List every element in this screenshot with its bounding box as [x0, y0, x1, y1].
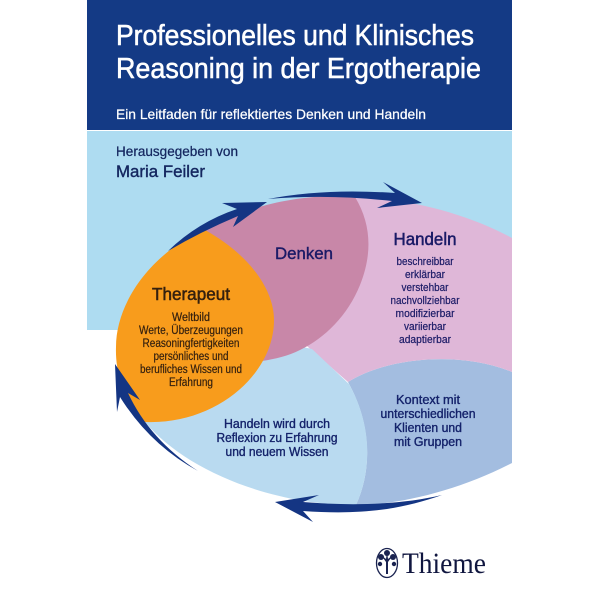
editor credit [116, 143, 238, 181]
text: Therapeut: berufliches Wissen und [140, 364, 242, 376]
text: Therapeut: Weltbild [172, 312, 210, 324]
panel: reflection segment [145, 340, 367, 505]
panel: Kontext segment [348, 359, 512, 505]
arrow: top left [168, 202, 267, 251]
subtitle: Ein Leitfaden für reflektiertes Denken und Handeln [116, 106, 426, 122]
text: Handeln list: beschreibbar [396, 256, 454, 268]
text: Handeln list: adaptierbar [399, 334, 451, 346]
wordmark: Thieme [402, 547, 486, 580]
title [116, 20, 481, 85]
text: Handeln list: erklärbar [405, 269, 445, 281]
text: reflection: Handeln wird durch [224, 417, 330, 431]
text: Handeln list: modifizierbar [396, 308, 455, 320]
panel: Handeln segment [300, 197, 512, 382]
text: Therapeut [139, 284, 243, 389]
text: Therapeut: Erfahrung [169, 377, 213, 389]
logo: Thieme [376, 547, 486, 580]
text: reflection: und neuem Wissen [226, 445, 329, 459]
panel: navy title band [87, 0, 512, 130]
panel: Denken segment [205, 196, 368, 361]
title: Reasoning in der Ergotherapie [116, 53, 481, 85]
editor credit: Maria Feiler [116, 162, 205, 181]
text: reflection: Reflexion zu Erfahrung [216, 431, 338, 445]
title: Professionelles und Klinisches [116, 20, 474, 52]
icon: tree emblem [376, 548, 398, 578]
text: reflection [216, 417, 338, 459]
text: Therapeut: Therapeut [152, 284, 230, 304]
text: Denken: Denken [275, 244, 333, 263]
text: Kontext: Kontext mit [396, 393, 461, 407]
text: Handeln list: verstehbar [402, 282, 449, 294]
text: Kontext: mit Gruppen [394, 435, 462, 449]
text: Handeln list [390, 229, 460, 346]
arrow: top right [268, 182, 422, 208]
text: Kontext: unterschiedlichen [380, 407, 476, 421]
editor credit: Herausgegeben von [116, 143, 238, 159]
text: Therapeut: persönliches und [154, 351, 228, 363]
text: Kontext [380, 393, 476, 449]
panel: light blue background [87, 131, 512, 330]
text: Therapeut: Werte, Überzeugungen [139, 325, 243, 337]
panel: Therapeut segment [116, 230, 274, 422]
arrow: bottom [275, 495, 442, 522]
text: Kontext: Klienten und [394, 421, 462, 435]
text: Handeln list: nachvollziehbar [390, 295, 460, 307]
text: Handeln list: variierbar [404, 321, 446, 333]
text: Handeln list: Handeln [394, 229, 456, 249]
arrow: left [115, 364, 198, 471]
text: Therapeut: Reasoningfertigkeiten [142, 338, 240, 350]
